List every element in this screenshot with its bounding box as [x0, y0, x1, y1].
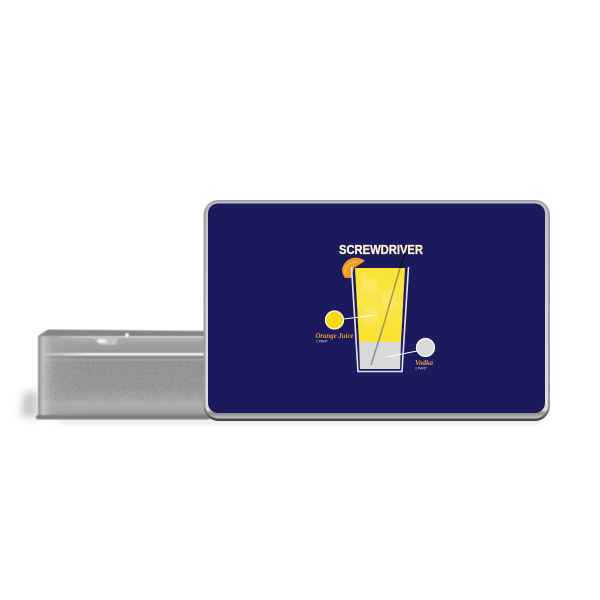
ingredient dot [326, 311, 344, 329]
vodka layer [359, 342, 401, 369]
ingredient amount: 1 PART [316, 340, 329, 344]
orange juice callout [316, 311, 375, 344]
title: SCREWDRIVER [339, 243, 423, 257]
lid navy panel [208, 204, 545, 413]
cocktail glass [352, 253, 408, 372]
shadow under tins [20, 392, 540, 422]
tin upper rim band [38, 336, 210, 353]
orange juice layer [355, 268, 405, 342]
tin left side sheen [38, 336, 88, 415]
tin lid line [60, 336, 210, 338]
ingredient amount: 1 PART [415, 366, 428, 370]
straw inside glass, juice section [383, 268, 400, 327]
lid outer frame [204, 200, 550, 421]
ingredient dot [416, 338, 434, 356]
open tin base behind the lid [36, 330, 212, 420]
lid inner frame [206, 202, 548, 418]
tin latch [92, 337, 118, 345]
tin bottom lip [36, 415, 210, 420]
tin main body [38, 360, 210, 415]
tin seam highlight [38, 353, 210, 356]
leader line [344, 315, 375, 319]
glass outline [352, 267, 408, 372]
straw inside glass, vodka section [371, 327, 383, 365]
icon: orange slice garnish [342, 258, 365, 278]
leader line [387, 351, 417, 357]
tin metal grain [42, 361, 208, 401]
ice cubes [361, 275, 398, 326]
ingredient name: Vodka [415, 359, 433, 367]
tin inner back edge [38, 330, 212, 338]
ingredient name: Orange Juice [316, 332, 354, 340]
vodka callout [387, 338, 434, 370]
straw above glass [400, 253, 405, 268]
